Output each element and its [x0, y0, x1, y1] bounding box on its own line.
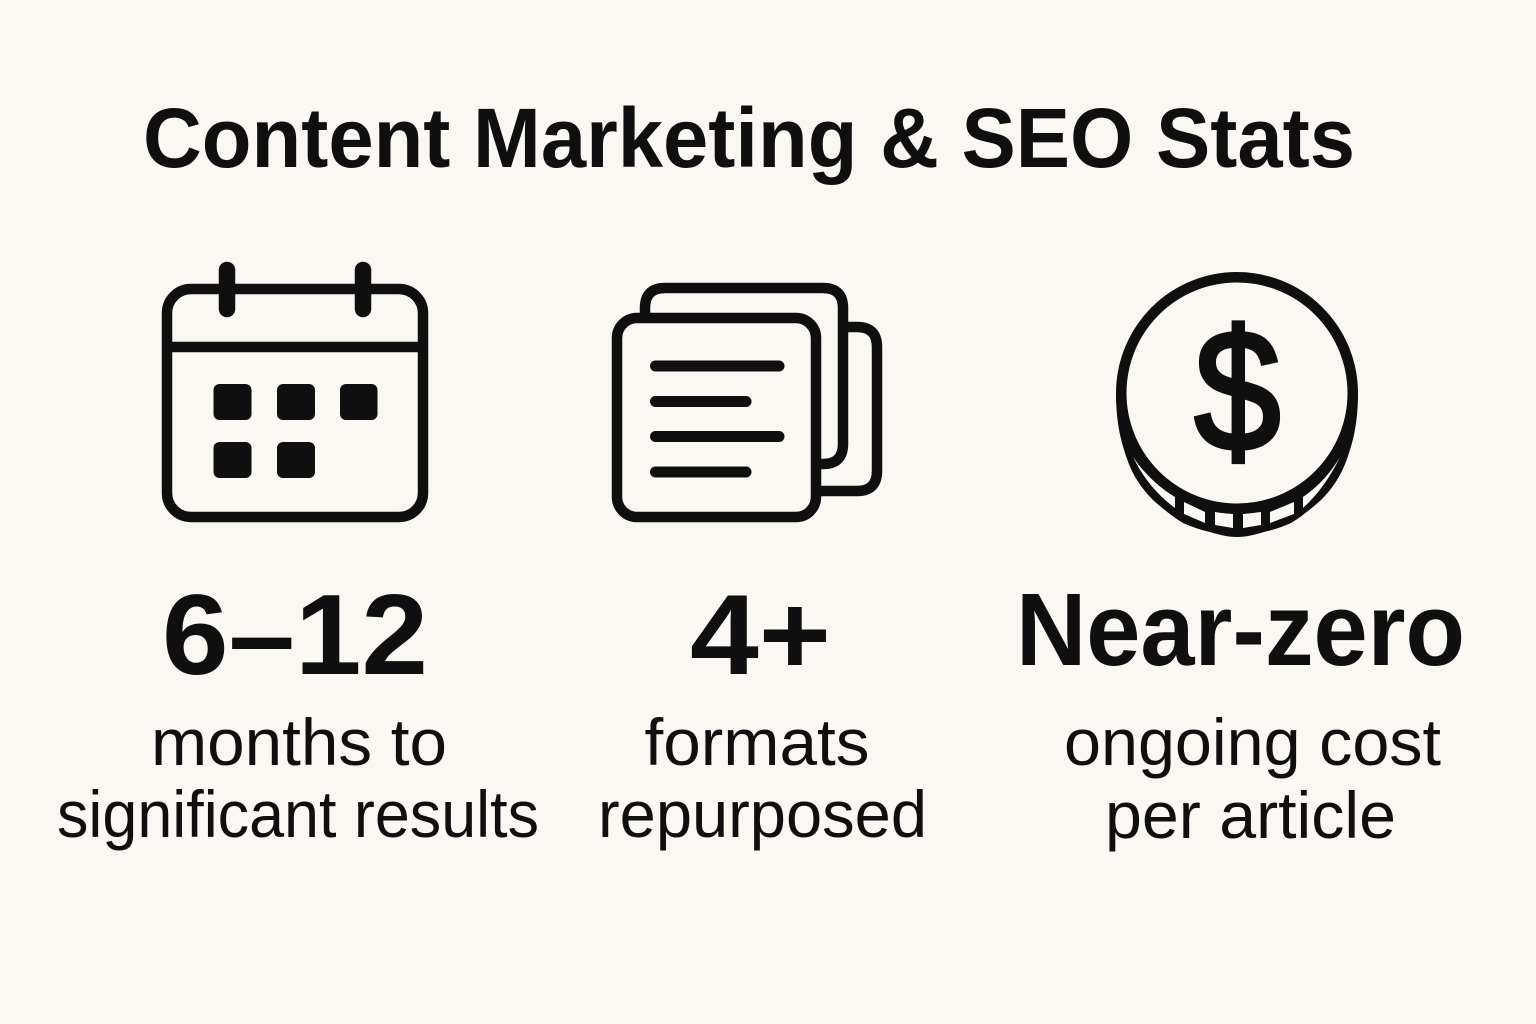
- icon: stacked documents: [617, 288, 877, 517]
- icon: dollar coin: $: [1194, 294, 1281, 487]
- title: Content Marketing & SEO Stats: [143, 91, 1355, 185]
- stat label: formats repurposed: formats: [644, 705, 870, 779]
- stat label: ongoing cost per article: ongoing cost: [1064, 705, 1441, 779]
- stat label: formats repurposed: repurposed: [598, 777, 927, 851]
- panel: timeline stat: [57, 270, 539, 851]
- stat value: 6–12: 6–12: [162, 572, 428, 699]
- panel: formats stat: [598, 288, 927, 851]
- icon: calendar: [167, 270, 423, 517]
- stat value: 4+: 4+: [690, 572, 831, 699]
- stat label: months to significant results: [57, 705, 539, 851]
- stat label: ongoing cost per article: per article: [1105, 778, 1396, 852]
- panel: cost stat: [1016, 277, 1465, 852]
- stat label: formats repurposed: [598, 705, 927, 851]
- stat label: months to significant results: months to: [151, 705, 447, 779]
- stat label: ongoing cost per article: [1064, 705, 1441, 852]
- stat value: Near-zero: Near-zero: [1016, 572, 1465, 687]
- icon: dollar coin: [1116, 277, 1358, 537]
- stat label: months to significant results: significant results: [57, 777, 539, 851]
